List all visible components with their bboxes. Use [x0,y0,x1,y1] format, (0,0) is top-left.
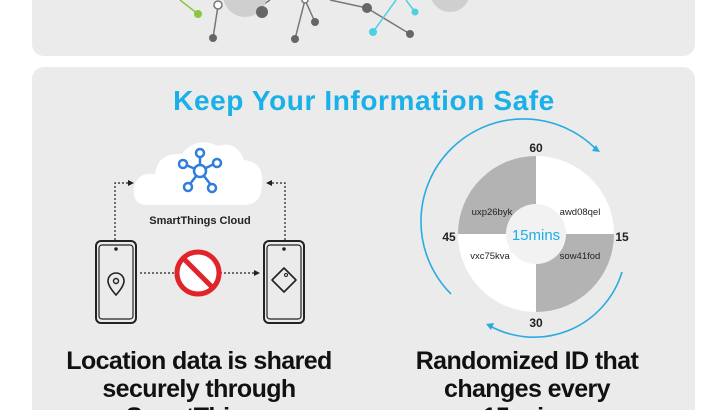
chart: randomized ID clock: 60 [529,141,543,155]
chart: randomized ID clock: uxp26byk [472,207,513,218]
arrows: circular blue [421,119,622,337]
chart: randomized ID clock [421,119,629,337]
title: Keep Your Information Safe [173,85,555,116]
text: randomized ID caption: changes every [444,375,611,403]
icon: left phone [96,241,136,323]
chart: randomized ID clock: vxc75kva [470,251,511,262]
chart: randomized ID clock: sow41fod [560,251,600,262]
text: location data caption: Location data is shared [66,347,332,375]
chart: randomized ID clock: 15mins [512,227,560,244]
chart: randomized ID clock: awd08qel [560,207,600,218]
panel: keep information safe [32,67,695,410]
icon: smartthings logo [179,149,221,192]
chart: randomized ID clock: 15 [615,230,629,244]
icon: network nodes [180,0,470,39]
panel: top network [32,0,695,56]
text: randomized ID caption: Randomized ID that [416,347,640,375]
text: location data caption: securely through [102,375,296,403]
text: SmartThings Cloud label: SmartThings Cloud [149,215,251,227]
chart: randomized ID clock: 30 [529,316,543,330]
icon: right phone [264,241,304,323]
chart: randomized ID clock: 45 [442,230,456,244]
arrows: dotted to cloud [115,183,285,273]
icon: prohibited sign [177,252,219,294]
icon: cloud [134,142,262,205]
